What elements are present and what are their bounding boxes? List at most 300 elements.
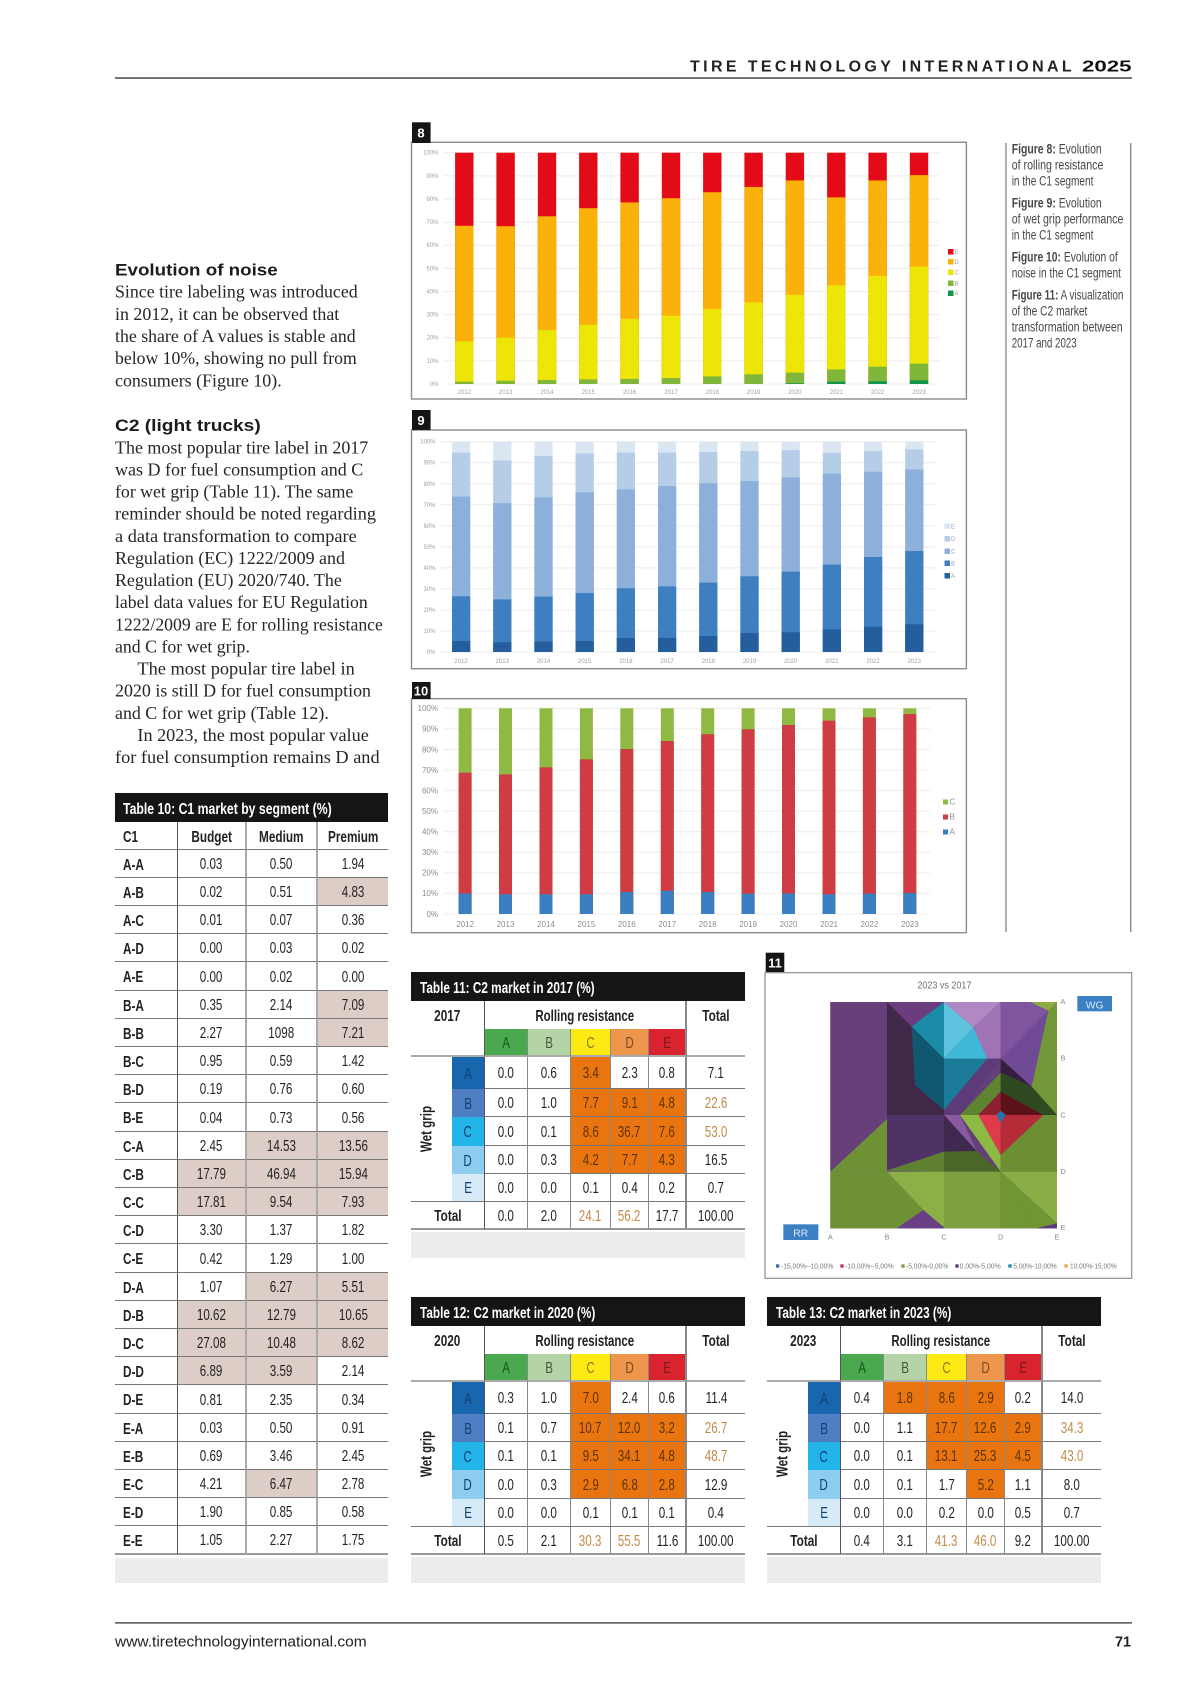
table 10 grid: 0.91 <box>342 1420 364 1437</box>
table 10 grid: 0.51 <box>270 884 293 901</box>
table 10 grid: A-B <box>123 885 144 902</box>
table 11 grid <box>411 1001 745 1230</box>
table 10 grid: 17.81 <box>197 1194 226 1211</box>
table 12 grid: 12.0 <box>618 1420 641 1437</box>
table 12 grid: 0.0 <box>498 1505 514 1522</box>
frame <box>412 699 966 933</box>
table 13 grid: 1.7 <box>938 1477 955 1494</box>
table 13 grid: 46.0 <box>974 1533 997 1550</box>
bar 2012 <box>452 442 470 652</box>
caption figure 11: Figure 11: A visualization <box>1012 287 1123 302</box>
table 11 grid: 100.00 <box>698 1208 734 1225</box>
legend: B <box>950 812 955 822</box>
table 13 grid: 2023 <box>790 1333 817 1350</box>
legend: C <box>950 798 956 806</box>
y axis labels: 100% <box>423 151 439 157</box>
table 10 grid: B-C <box>123 1054 144 1071</box>
legend <box>944 524 956 580</box>
table 10 grid: 0.03 <box>200 856 223 873</box>
y axis labels: 20% <box>426 336 439 342</box>
table 13 grid: E <box>820 1505 828 1522</box>
table 10 grid: D-D <box>123 1364 144 1381</box>
caption figure 9 <box>1012 195 1123 242</box>
table 13 grid: 0.1 <box>897 1448 913 1465</box>
table 10 grid: D-E <box>123 1392 143 1409</box>
axis letters: D <box>1060 1167 1066 1176</box>
table 13 grid: 0.2 <box>938 1505 955 1522</box>
table 10 grid: 0.02 <box>270 969 293 986</box>
table 11 grid: E <box>464 1180 472 1197</box>
footer <box>114 1622 1132 1651</box>
y axis labels: 10% <box>426 359 439 365</box>
table 12 grid: 4.8 <box>659 1448 675 1465</box>
table 13 grid: Total <box>1058 1333 1086 1350</box>
bar 2017 <box>658 442 676 652</box>
table 10 grid: 0.00 <box>200 969 223 986</box>
legend: D <box>954 260 960 266</box>
table 11 grid: E <box>663 1035 671 1052</box>
RR label <box>783 1224 818 1240</box>
table 11 grid: 24.1 <box>579 1208 602 1225</box>
text block: C2 light trucks: reminder should be noted regarding <box>115 504 376 524</box>
x axis labels: 2016 <box>618 920 636 929</box>
table 13 grid: 0.7 <box>1064 1505 1080 1522</box>
x axis labels: 2020 <box>784 659 798 665</box>
bar 2021 <box>823 442 841 652</box>
y axis labels: 100% <box>418 704 438 713</box>
y axis labels: 90% <box>422 725 438 734</box>
table 11 grid: 0.1 <box>582 1180 599 1197</box>
table 12 grid: 0.1 <box>498 1448 514 1465</box>
table 11 grid: 0.0 <box>498 1180 514 1197</box>
y axis labels: 70% <box>422 766 438 775</box>
table 10 grid: 0.85 <box>270 1504 293 1521</box>
table 10 grid: 0.95 <box>200 1053 223 1070</box>
bar 2019 <box>740 442 759 652</box>
bar 2018 <box>699 442 717 652</box>
table 12 grid: B <box>464 1421 472 1438</box>
website url: www.tiretechnologyinternational.com <box>114 1635 367 1651</box>
table 13 grid: D <box>981 1360 990 1377</box>
WG label: WG <box>1086 1000 1104 1011</box>
table 10 grid: 0.50 <box>270 856 293 873</box>
table 10 grid: 1.00 <box>342 1251 364 1268</box>
table 12 grid: 6.8 <box>621 1477 638 1494</box>
table 12 grid: 9.5 <box>582 1448 599 1465</box>
table 12 grid: B <box>545 1360 553 1377</box>
table 12 grid: 2.4 <box>621 1390 638 1407</box>
caption figure 8: in the C1 segment <box>1012 173 1094 188</box>
table 10 grid: 0.58 <box>342 1504 364 1521</box>
table 10 grid <box>115 822 388 1555</box>
x axis labels <box>456 920 919 929</box>
bar 2016 <box>617 442 635 652</box>
table 10 grid: 1.75 <box>342 1532 364 1549</box>
bar 2019 <box>742 708 755 914</box>
table 13 grid: 1.8 <box>897 1390 913 1407</box>
table 13 grid: Rolling resistance <box>892 1333 990 1350</box>
table 13: C2 market in 2023 <box>767 1297 1101 1583</box>
legend: 0,00%-5,00% <box>960 1262 1001 1271</box>
y axis labels: 20% <box>422 869 438 878</box>
table 10 grid: 0.35 <box>200 997 223 1014</box>
table 11 grid: 7.6 <box>659 1124 675 1141</box>
bar 2023 <box>905 442 923 652</box>
y axis labels: 80% <box>426 197 439 203</box>
x axis labels: 2022 <box>866 659 880 665</box>
caption figure 9: of wet grip performance <box>1012 212 1123 226</box>
table 10 grid: B-E <box>123 1110 143 1127</box>
table 10 grid: C-A <box>123 1139 144 1156</box>
figure 10 panel: noise stacked bars <box>412 682 966 933</box>
caption figure 8: of rolling resistance <box>1012 157 1103 172</box>
text block: C2 light trucks <box>115 416 383 767</box>
axis letters: C <box>941 1232 947 1241</box>
y axis labels: 90% <box>423 461 436 467</box>
running header: 2025 <box>1082 59 1132 76</box>
table 13 grid: 8.6 <box>938 1390 955 1407</box>
table 10 grid: 0.81 <box>200 1392 223 1409</box>
table 10 grid: 2.14 <box>342 1363 364 1380</box>
table 12 grid: A <box>464 1391 472 1408</box>
badge 11: 11 <box>768 956 782 970</box>
table 13 grid: C <box>820 1449 828 1466</box>
axis letters <box>828 997 1066 1241</box>
table 12 grid: 0.4 <box>708 1505 724 1522</box>
table 11 grid: 0.0 <box>498 1152 514 1169</box>
table 12 grid: 55.5 <box>618 1533 641 1550</box>
text block: C2 light trucks: for fuel consumption remains D and <box>115 747 380 767</box>
y axis labels <box>420 440 436 656</box>
table 12 grid: 0.7 <box>541 1420 557 1437</box>
bar 2018 <box>701 708 714 914</box>
text block: C2 light trucks: The most popular tire label in 2017 <box>115 437 368 457</box>
table 12 grid: 11.6 <box>656 1533 678 1550</box>
legend: B <box>951 562 955 568</box>
bar 2015 <box>580 708 593 914</box>
table 13 grid: B <box>901 1360 909 1377</box>
legend: -10,00%--5,00% <box>845 1262 894 1271</box>
table 12 grid: 0.5 <box>498 1533 514 1550</box>
table 11 grid: Total <box>434 1208 461 1225</box>
table 12 grid: 10.7 <box>579 1420 602 1437</box>
x axis labels: 2022 <box>861 920 879 929</box>
text block: C2 light trucks: In 2023, the most popular value <box>137 725 369 745</box>
table 11 grid: A <box>502 1035 510 1052</box>
table 11 grid: 7.7 <box>621 1152 638 1169</box>
table 10 grid: C1 <box>123 829 138 846</box>
frame <box>412 430 966 669</box>
table 13 grid: 0.4 <box>854 1533 870 1550</box>
legend <box>776 1262 1117 1271</box>
table 11 grid: 0.0 <box>498 1065 514 1082</box>
table 11 grid: 1.0 <box>541 1095 557 1112</box>
y axis labels: 80% <box>422 745 438 754</box>
table 10 grid: A-D <box>123 941 144 958</box>
bar 2023 <box>903 708 916 914</box>
table 13 grey footer strip <box>767 1557 1101 1583</box>
table 13 grid: 0.0 <box>854 1420 870 1437</box>
figure 11 panel: 2023 vs 2017 surface chart <box>765 953 1132 1278</box>
table 10 grid: 0.01 <box>200 912 223 929</box>
table 11 grid: 56.2 <box>618 1208 641 1225</box>
table 13 grid: 0.1 <box>897 1477 913 1494</box>
x axis labels: 2012 <box>454 659 468 665</box>
x axis labels: 2017 <box>660 659 674 665</box>
table 13 grid: 34.3 <box>1061 1420 1083 1437</box>
x axis labels <box>454 659 922 665</box>
legend: 10,00%-15,00% <box>1070 1262 1117 1271</box>
x axis labels: 2020 <box>788 390 802 396</box>
table 10 grid: 0.36 <box>342 912 364 929</box>
table 12 grid: C <box>464 1449 472 1466</box>
table 10 grid: 6.89 <box>200 1363 223 1380</box>
table 13 grid: 5.2 <box>977 1477 994 1494</box>
table 10 grid: C-B <box>123 1167 144 1184</box>
table 10 grid: 12.79 <box>267 1307 296 1324</box>
caption figure 10: Figure 10: Evolution of <box>1012 250 1118 265</box>
table 12 grid: 0.1 <box>582 1505 599 1522</box>
text block: evolution of noise: consumers (Figure 10). <box>115 370 282 391</box>
table 12 grid: 1.0 <box>541 1390 557 1407</box>
table 10 grid: C-C <box>123 1195 144 1212</box>
text block: C2 light trucks: Regulation (EC) 1222/2009 and <box>115 548 345 569</box>
table 10 grid: 2.78 <box>342 1476 364 1493</box>
bar 2016 <box>620 708 633 914</box>
x axis labels: 2015 <box>578 920 596 929</box>
table 10 grid: 4.21 <box>200 1476 223 1493</box>
legend: A <box>954 292 959 298</box>
table 11 grid: D <box>464 1153 472 1170</box>
bar 2019 <box>744 153 763 384</box>
x axis labels: 2014 <box>537 659 551 665</box>
table 11 grid: 0.1 <box>541 1124 557 1141</box>
table 11 grid: 22.6 <box>705 1095 727 1112</box>
table 11 grid: 0.8 <box>659 1065 675 1082</box>
table 10 grid: 6.47 <box>270 1476 293 1493</box>
table 13 title: Table 13: C2 market in 2023 (%) <box>776 1304 951 1322</box>
y axis labels: 60% <box>426 243 439 249</box>
table 13 grid: 0.4 <box>854 1390 870 1407</box>
table 10 grid: E-D <box>123 1505 143 1522</box>
table 13 grid: B <box>820 1421 828 1438</box>
table 10 grid: 4.83 <box>342 884 364 901</box>
table 11 grid: 2.3 <box>621 1065 638 1082</box>
badge 11 <box>766 953 784 973</box>
y axis labels: 100% <box>420 440 436 446</box>
table 12 grid: 11.4 <box>705 1390 727 1407</box>
y axis labels: 60% <box>422 786 438 795</box>
badge 10 <box>412 682 431 699</box>
table 10 grid: 9.54 <box>270 1194 293 1211</box>
x axis labels: 2013 <box>497 920 515 929</box>
table 12 grid: 2.8 <box>659 1477 675 1494</box>
table 10 grid: 0.76 <box>270 1081 293 1098</box>
table 11 grey footer strip <box>411 1232 745 1258</box>
table 12 grid: Rolling resistance <box>536 1333 634 1350</box>
x axis labels: 2017 <box>664 390 678 396</box>
x axis labels: 2015 <box>578 659 592 665</box>
axis letters: C <box>1060 1110 1066 1119</box>
table 13 grid: 0.0 <box>854 1448 870 1465</box>
x axis labels: 2012 <box>456 920 475 929</box>
table 10 grid: E-E <box>123 1533 143 1550</box>
table 10 grid: 0.00 <box>200 940 223 957</box>
table 10 grid: 2.27 <box>270 1532 293 1549</box>
y axis labels: 20% <box>423 608 436 614</box>
table 10 grid: 0.50 <box>270 1420 293 1437</box>
table 11 grid: 0.0 <box>498 1208 514 1225</box>
table 11 grid: 9.1 <box>621 1095 638 1112</box>
table 10 grid: Medium <box>259 829 304 846</box>
table 12 grid: 2.9 <box>582 1477 599 1494</box>
legend <box>948 249 960 298</box>
text block: evolution of noise: Since tire labeling was introduced <box>115 282 358 302</box>
x axis labels: 2019 <box>739 920 758 929</box>
table 13 grid: 0.5 <box>1015 1505 1031 1522</box>
axis letters: A <box>828 1232 833 1241</box>
table 10 grid: E-A <box>123 1421 143 1438</box>
legend: -5,00%-0,00% <box>906 1262 949 1271</box>
caption figure 11: of the C2 market <box>1012 303 1088 318</box>
table 10 grid: 0.69 <box>200 1448 223 1465</box>
table 10 grid: C-E <box>123 1251 143 1268</box>
table 13 grid: 13.1 <box>935 1448 958 1465</box>
bar 2014 <box>538 153 556 384</box>
table 11 grid: 0.7 <box>708 1180 724 1197</box>
table 13 grid: A <box>858 1360 866 1377</box>
y axis labels: 40% <box>422 828 438 836</box>
figure 9 panel: wet grip stacked bars <box>412 410 966 669</box>
table 10 grid: 27.08 <box>197 1335 226 1352</box>
table 12 grid: Wet grip <box>418 1431 435 1477</box>
table 10 grid: E-B <box>123 1449 143 1466</box>
x axis labels: 2021 <box>820 920 838 929</box>
table 12 grid: E <box>663 1360 671 1377</box>
table 13 grid: 12.6 <box>974 1420 997 1437</box>
table 10 grid: 0.04 <box>200 1110 223 1127</box>
y axis labels: 40% <box>426 290 439 296</box>
table 10 grid: 0.02 <box>200 884 223 901</box>
bar 2020 <box>786 153 804 384</box>
table 13 grid: 0.2 <box>1015 1390 1031 1407</box>
table 12 grid: 48.7 <box>705 1448 727 1465</box>
y axis labels: 40% <box>423 566 436 572</box>
heading: evolution of noise: Evolution of noise <box>115 261 278 280</box>
table 13 grid: 2.9 <box>977 1390 994 1407</box>
bar 2022 <box>864 442 882 652</box>
running header: TIRE TECHNOLOGY INTERNATIONAL <box>690 59 1072 76</box>
table 10 grid: 1.07 <box>200 1279 223 1296</box>
table 10 grid: 7.93 <box>342 1194 364 1211</box>
table 10 grid: 0.56 <box>342 1110 364 1127</box>
table 10 grid: 10.48 <box>267 1335 296 1352</box>
y axis labels: 30% <box>426 313 439 319</box>
table 10 grid: 0.00 <box>342 969 364 986</box>
x axis labels: 2019 <box>747 390 761 396</box>
table 13 grid: 41.3 <box>935 1533 958 1550</box>
table 12 grid: 2.1 <box>541 1533 557 1550</box>
x axis labels: 2016 <box>623 390 637 396</box>
table 11 grid: 16.5 <box>705 1152 727 1169</box>
bar 2016 <box>620 153 639 384</box>
table 12: C2 market in 2020 <box>411 1297 745 1583</box>
y axis labels: 50% <box>422 807 438 816</box>
table 10 grid: 0.59 <box>270 1053 293 1070</box>
axis letters: E <box>1055 1232 1060 1241</box>
table 10 grid: 7.21 <box>342 1025 364 1042</box>
table 12 grid: 0.0 <box>498 1477 514 1494</box>
table 10 grid: D-A <box>123 1280 144 1297</box>
table 11 grid: 4.3 <box>659 1152 675 1169</box>
legend: 5,00%-10,00% <box>1013 1262 1057 1271</box>
x axis labels: 2012 <box>458 390 472 396</box>
text block: C2 light trucks: 2020 is still D for fuel consumption <box>115 681 371 701</box>
text block: evolution of noise: below 10%, showing no pull from <box>115 348 357 368</box>
text block: C2 light trucks: The most popular tire label in <box>137 659 355 679</box>
table 10 grid: B-D <box>123 1082 144 1099</box>
text block: C2 light trucks: label data values for EU Regulation <box>115 592 368 612</box>
table 10 grid: 0.07 <box>270 912 293 929</box>
table 10 grid: 2.35 <box>270 1392 293 1409</box>
table 12 grid <box>411 1326 745 1555</box>
legend: E <box>951 524 955 530</box>
table 11 grid: B <box>464 1096 472 1113</box>
table 11 grid: 2.0 <box>541 1208 557 1225</box>
x axis labels <box>458 390 926 396</box>
axis letters: D <box>998 1232 1003 1241</box>
table 10 grid: 0.03 <box>200 1420 223 1437</box>
table 10 grid: 0.19 <box>200 1081 223 1098</box>
x axis labels: 2023 <box>912 390 926 396</box>
y axis labels: 50% <box>423 545 436 551</box>
y axis labels: 0% <box>430 382 439 388</box>
table 12 grey footer strip <box>411 1557 745 1583</box>
table 13 grid: 0.0 <box>854 1477 870 1494</box>
caption figure 8 <box>1012 141 1103 188</box>
x axis labels: 2018 <box>706 390 720 396</box>
table 10 grey footer strip <box>115 1558 388 1583</box>
table 10 grid: 1.29 <box>270 1251 293 1268</box>
table 10 grid: Premium <box>328 829 378 846</box>
table 12 title <box>411 1297 745 1326</box>
y axis labels: 60% <box>423 524 436 530</box>
page number: 71 <box>1115 1635 1131 1651</box>
x axis labels: 2014 <box>540 390 554 396</box>
table 12 grid: Total <box>434 1533 461 1550</box>
table 11 title: Table 11: C2 market in 2017 (%) <box>420 980 595 996</box>
table 13 grid: A <box>820 1391 828 1408</box>
bar 2017 <box>662 153 680 384</box>
x axis labels: 2016 <box>619 659 633 665</box>
caption figure 11 <box>1012 287 1123 350</box>
table 13 grid: 43.0 <box>1061 1448 1083 1465</box>
table 12 grid: C <box>586 1360 595 1377</box>
table 13 grid: 4.5 <box>1015 1448 1031 1465</box>
y axis labels: 70% <box>423 503 436 509</box>
legend: D <box>951 537 956 543</box>
bar 2012 <box>459 708 472 914</box>
heading: C2 light trucks: C2 (light trucks) <box>115 416 261 435</box>
table 13 grid: Total <box>790 1533 817 1550</box>
table 10 grid: 0.03 <box>270 940 293 957</box>
badge 8 <box>412 122 431 143</box>
table 13 grid: 17.7 <box>935 1420 958 1437</box>
caption figure 10 <box>1012 250 1121 281</box>
bar 2020 <box>782 708 795 914</box>
table 11 grid: 0.0 <box>498 1124 514 1141</box>
table 11 grid: C <box>464 1124 472 1141</box>
